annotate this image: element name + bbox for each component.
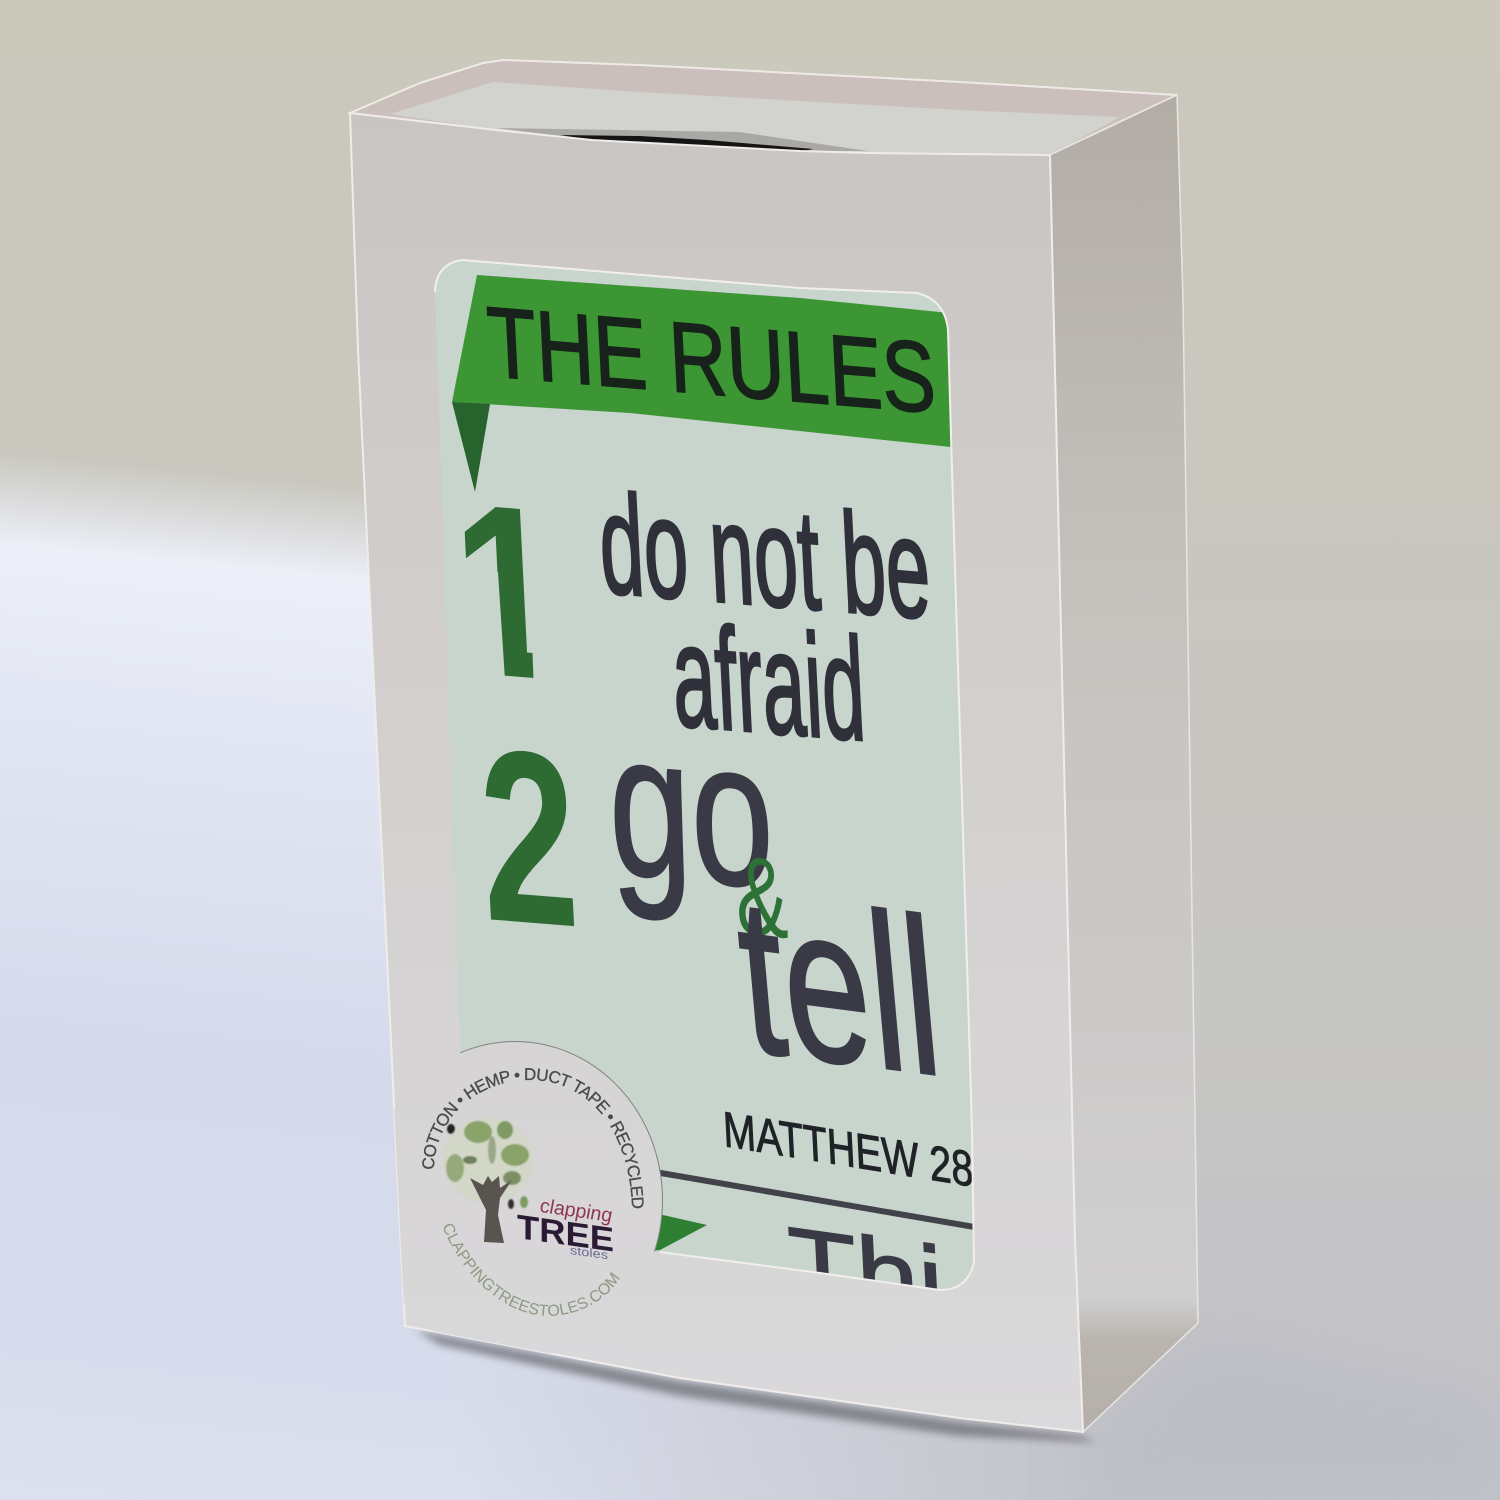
rule 1 text: afraid bbox=[668, 594, 869, 772]
banner heading: THE RULES bbox=[485, 286, 938, 435]
number 2: 2 bbox=[474, 697, 584, 980]
round logo sticker bbox=[394, 1042, 662, 1354]
sticker curved text top: COTTON • HEMP • DUCT TAPE • RECYCLED bbox=[422, 1068, 644, 1208]
sticker edge shadow on fabric bbox=[460, 1041, 663, 1252]
rule 1 text: do not be bbox=[596, 464, 934, 649]
stole fabric bbox=[420, 250, 990, 1300]
green banner bbox=[452, 275, 960, 492]
box: rear lip of lid bbox=[350, 60, 1177, 155]
icon: tree bbox=[443, 1117, 533, 1243]
window with stole inside bbox=[435, 261, 973, 1289]
sticker logo wordmark: clapping bbox=[540, 1195, 612, 1227]
rule 2 text: go bbox=[605, 687, 776, 932]
sticker logo wordmark: TREE bbox=[517, 1208, 614, 1260]
rule 2 text: & bbox=[734, 831, 790, 962]
sticker logo wordmark: stoles bbox=[570, 1243, 608, 1262]
box: top opening slot bbox=[496, 128, 868, 152]
window edge highlight bbox=[435, 260, 974, 1290]
divider line and arrow bbox=[640, 1172, 980, 1252]
cast shadow under box bbox=[415, 1330, 1095, 1442]
scripture reference: MATTHEW 28 bbox=[722, 1100, 975, 1198]
box: front panel bbox=[350, 113, 1083, 1432]
sticker curved url: CLAPPINGTREESTOLES.COM bbox=[444, 1224, 620, 1316]
clipped text below divider: Thi bbox=[786, 1206, 946, 1340]
rule 2 text: tell bbox=[729, 850, 949, 1123]
number 1: 1 bbox=[448, 451, 566, 733]
box: right side panel bbox=[1050, 95, 1198, 1432]
rule 2 text bbox=[614, 764, 936, 1076]
rule 1 text bbox=[602, 490, 928, 742]
box: top flap bbox=[390, 82, 1120, 155]
